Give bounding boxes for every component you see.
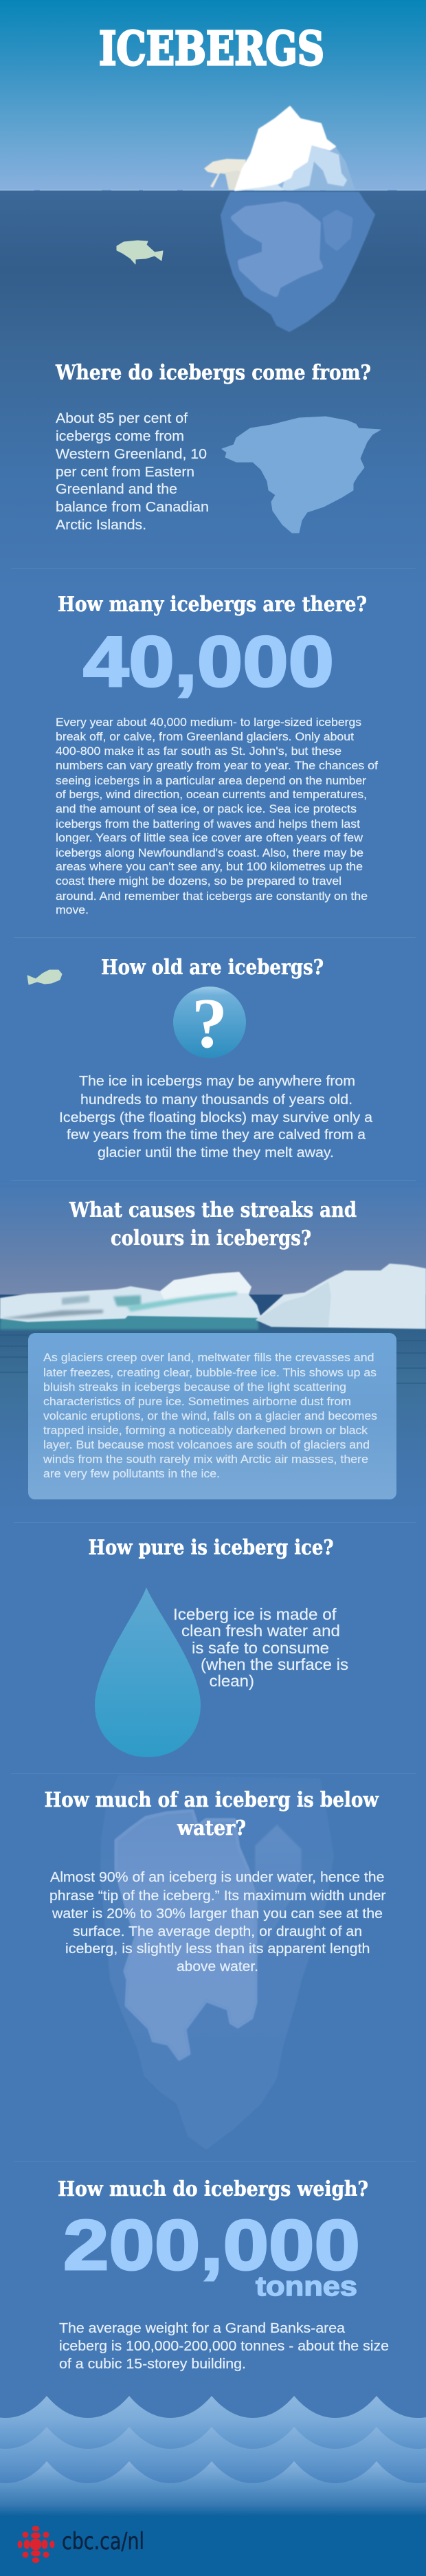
- text block: bluish streaks in icebergs because of the light scattering: [43, 1381, 346, 1394]
- wave row 3: [0, 2461, 426, 2516]
- text block: volcanic eruptions, or the wind, falls on a glacier and becomes: [43, 1410, 377, 1422]
- text block: longer. Years of little sea ice cover are often years of few: [56, 831, 363, 844]
- text block: trapped inside, forming a noticeably darkened brown or black: [43, 1424, 368, 1437]
- panel: how pure: [88, 1536, 348, 1757]
- text block: [59, 2321, 389, 2372]
- text block: icebergs along Newfoundland's coast. Also, there may be: [56, 846, 363, 859]
- divider: [14, 2161, 416, 2162]
- wave row 1: [0, 2396, 426, 2516]
- text block: As glaciers creep over land, meltwater fills the crevasses and: [43, 1352, 374, 1364]
- panel: how old are icebergs: [27, 956, 373, 1160]
- text block: [173, 1605, 348, 1690]
- text block: The ice in icebergs may be anywhere from: [79, 1074, 355, 1089]
- text block: [56, 411, 209, 533]
- text block: numbers can vary greatly from year to year. The chances of: [56, 759, 378, 772]
- panel: how many icebergs: [56, 593, 378, 916]
- text block: above water.: [177, 1959, 258, 1974]
- text block: seeing icebergs in a particular area depend on the number: [56, 774, 366, 787]
- faded iceberg illustration: [100, 1775, 334, 2150]
- text block: is safe to consume: [192, 1639, 329, 1657]
- heading: How many icebergs are there?: [58, 593, 367, 617]
- text block: around. And remember that icebergs are constantly on the: [56, 890, 368, 903]
- footer band: [0, 2516, 426, 2576]
- text block: areas where you can't see any, but 100 kilometres up the: [56, 860, 363, 873]
- text block: Greenland and the: [56, 482, 177, 497]
- iceberg above water: [235, 107, 355, 190]
- text block: clean): [209, 1672, 254, 1690]
- photo: sea: [0, 1295, 426, 1512]
- text block: About 85 per cent of: [56, 411, 188, 426]
- panel: how much is below water: [44, 1775, 386, 2150]
- text block: Icebergs (the floating blocks) may survive only a: [59, 1110, 373, 1125]
- photo: icebergs: [0, 1264, 426, 1329]
- text block: Arctic Islands.: [56, 518, 146, 533]
- title: ICEBERGS: [99, 21, 324, 76]
- panel: where icebergs come from: [55, 361, 381, 533]
- text block: Iceberg ice is made of: [173, 1605, 337, 1623]
- divider: [11, 568, 416, 569]
- text block: layer. But because most volcanoes are south of glaciers and: [43, 1439, 370, 1451]
- heading: What causes the streaks and: [69, 1198, 357, 1222]
- icon: fish: [117, 241, 163, 264]
- panel: streaks and colours: [0, 1182, 426, 1512]
- iceberg below water: [221, 192, 374, 331]
- panel: footer waves: [0, 2396, 426, 2576]
- text block: Every year about 40,000 medium- to large-sized icebergs: [56, 716, 361, 729]
- text block: few years from the time they are calved from a: [67, 1127, 366, 1143]
- text block: of a cubic 15-storey building.: [59, 2357, 246, 2372]
- text block: per cent from Eastern: [56, 465, 194, 480]
- text block: are very few pollutants in the ice.: [43, 1468, 220, 1480]
- heading: How much of an iceberg is below: [44, 1788, 379, 1812]
- text block: move.: [56, 903, 89, 916]
- water line: [0, 190, 426, 191]
- text block: The average weight for a Grand Banks-area: [59, 2321, 346, 2336]
- deep water: [0, 190, 426, 591]
- big number: 40,000: [83, 622, 334, 702]
- unit label: tonnes: [256, 2271, 357, 2302]
- text block: water is 20% to 30% larger than you can see at the: [52, 1906, 383, 1922]
- text block: [49, 1870, 386, 1974]
- heading: water?: [177, 1816, 246, 1840]
- text panel: [28, 1333, 396, 1499]
- text block: winds from the south rarely mix with Arctic air masses, there: [43, 1453, 368, 1466]
- heading: [44, 1788, 379, 1840]
- text block: [56, 716, 378, 916]
- divider: [14, 1522, 416, 1523]
- divider: [11, 1773, 416, 1774]
- panel: header scene: [0, 0, 426, 591]
- icon: small fish: [27, 970, 62, 984]
- text block: 400-800 make it as far south as St. John's, but these: [56, 745, 341, 758]
- logo text: cbc.ca/nl: [62, 2528, 144, 2555]
- heading: colours in icebergs?: [111, 1226, 311, 1251]
- heading: Where do icebergs come from?: [55, 361, 371, 385]
- heading: How much do icebergs weigh?: [58, 2177, 368, 2201]
- text block: characteristics of pure ice. Sometimes airborne dust from: [43, 1396, 351, 1408]
- text block: later freezes, creating clear, bubble-free ice. This shows up as: [43, 1367, 377, 1379]
- text block: phrase “tip of the iceberg.” Its maximum width under: [49, 1889, 386, 1904]
- icon: CBC gem logo: [18, 2526, 55, 2563]
- text block: [59, 1074, 373, 1160]
- text block: Western Greenland, 10: [56, 447, 207, 462]
- text block: icebergs come from: [56, 429, 184, 444]
- icon: map of Greenland: [222, 417, 381, 533]
- wave row 2: [0, 2427, 426, 2516]
- text block: (when the surface is: [201, 1655, 348, 1673]
- photo: sky backdrop: [0, 1182, 426, 1299]
- icon: polar bear: [204, 159, 246, 190]
- panel: how much do icebergs weigh: [58, 2177, 389, 2372]
- heading: How pure is iceberg ice?: [88, 1536, 334, 1560]
- divider: [11, 1180, 416, 1181]
- icon: question mark badge: ?: [192, 984, 227, 1063]
- text block: icebergs from the battering of waves and helps them last: [56, 817, 360, 830]
- text block: balance from Canadian: [56, 500, 209, 515]
- text block: break off, or calve, from Greenland glaciers. Only about: [56, 730, 354, 743]
- heading: [69, 1198, 357, 1251]
- text block: surface. The average depth, or draught of an: [73, 1924, 362, 1939]
- big number: 200,000: [63, 2205, 360, 2285]
- text block: hundreds to many thousands of years old.: [80, 1092, 352, 1108]
- icon: question mark badge: [173, 984, 246, 1063]
- heading: How old are icebergs?: [101, 956, 324, 980]
- text block: of bergs, wind direction, ocean currents and temperatures,: [56, 788, 367, 801]
- icon: water drop: [95, 1587, 201, 1757]
- text block: clean fresh water and: [181, 1622, 340, 1640]
- text block: glacier until the time they melt away.: [98, 1145, 334, 1160]
- text block: and the amount of sea ice, or pack ice. Sea ice protects: [56, 802, 357, 815]
- text block: [43, 1352, 377, 1480]
- text block: coast there might be dozens, so be prepared to travel: [56, 874, 341, 888]
- divider: [14, 937, 416, 938]
- text block: iceberg, is slightly less than its apparent length: [65, 1941, 370, 1957]
- text block: iceberg is 100,000-200,000 tonnes - about the size: [59, 2339, 389, 2354]
- text block: Almost 90% of an iceberg is under water, hence the: [50, 1870, 385, 1885]
- sky: [0, 0, 426, 190]
